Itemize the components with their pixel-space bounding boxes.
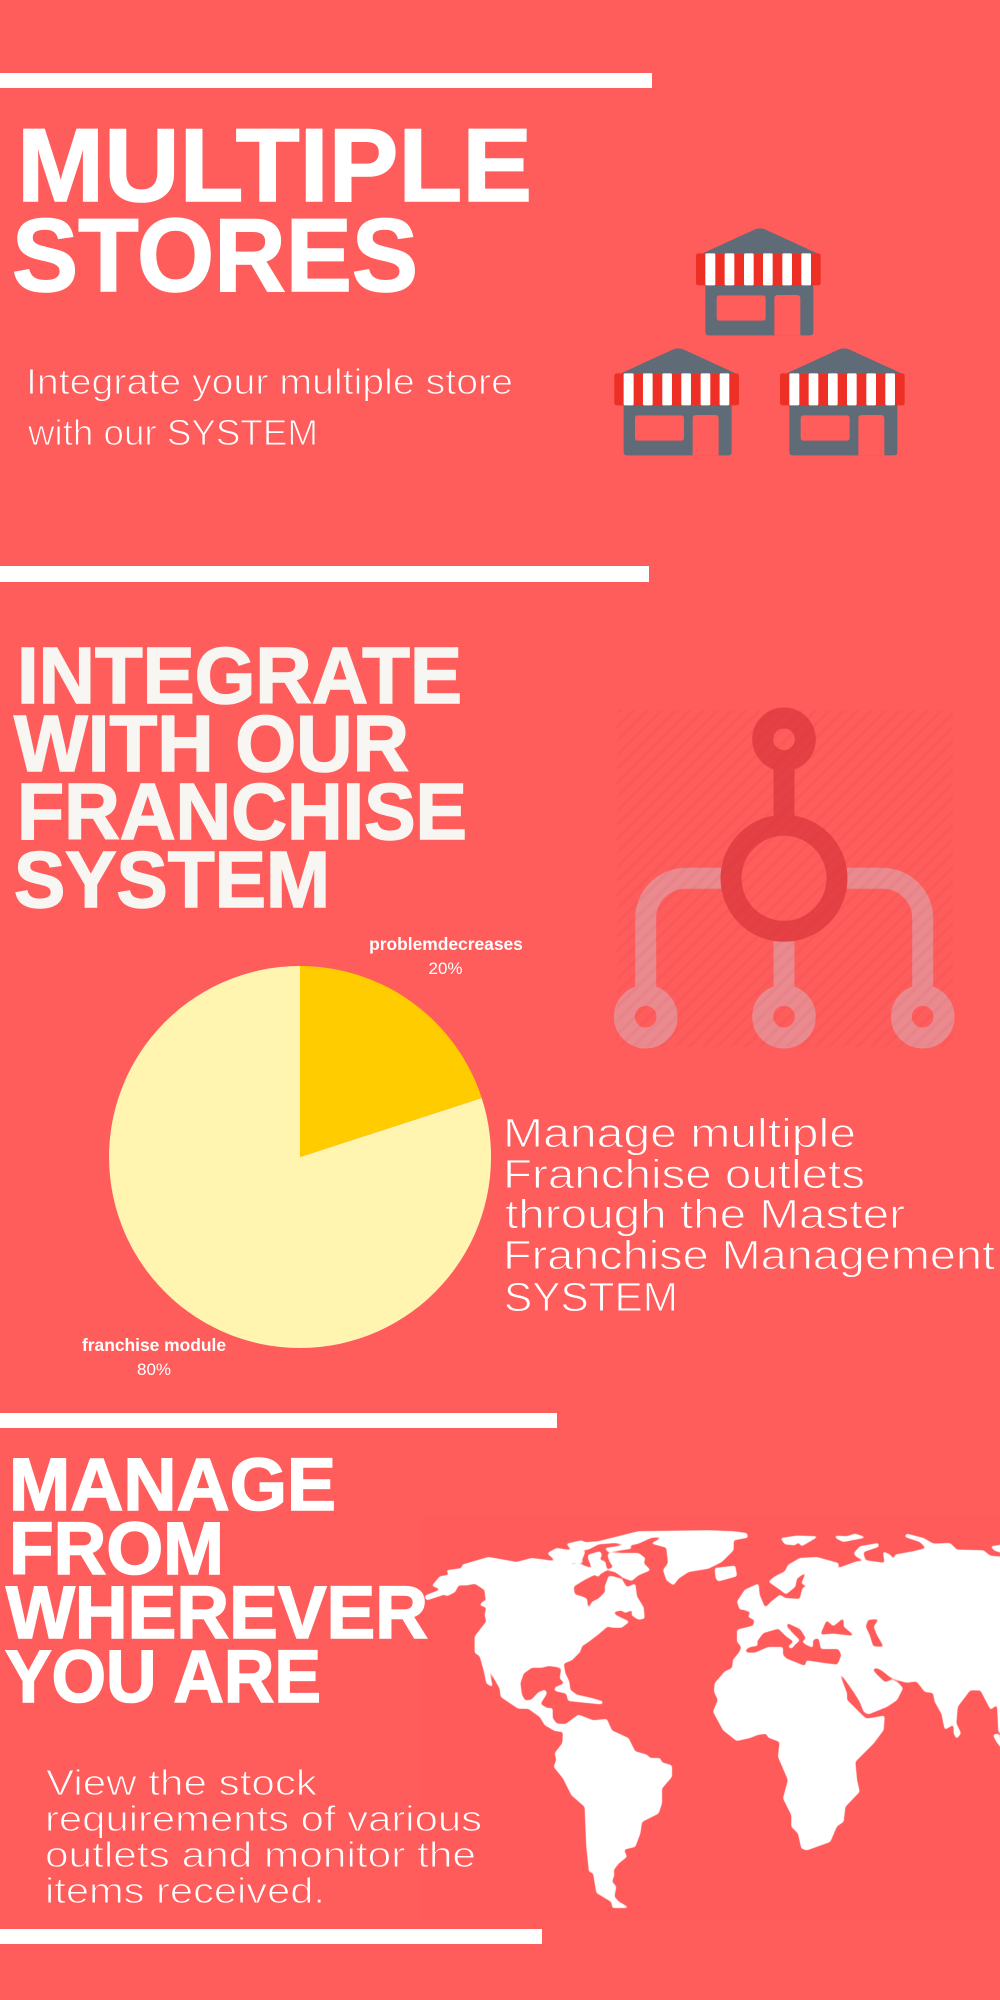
icon: bottom left store xyxy=(614,348,739,455)
title: manage from wherever you are: WHEREVER xyxy=(6,1571,428,1654)
text: integrate your multiple store xyxy=(26,361,513,453)
value: 20%: 20% xyxy=(428,959,463,978)
label: problemdecreases: problemdecreases xyxy=(369,934,523,954)
black sea xyxy=(821,1618,854,1636)
hudson bay xyxy=(574,1575,608,1608)
decorative hatch square xyxy=(617,710,953,1047)
text: view the stock requirements: View the stock xyxy=(46,1762,318,1803)
adriatic sea xyxy=(787,1623,806,1642)
text: view the stock requirements xyxy=(45,1762,482,1911)
title: integrate with our franchise system: SYSTEM xyxy=(14,835,330,924)
title: integrate with our franchise system: FRANCHISE xyxy=(17,767,467,856)
title: manage from wherever you are xyxy=(5,1443,428,1718)
title: integrate with our franchise system: INTEGRATE xyxy=(17,631,462,720)
title: multiple stores xyxy=(12,108,532,314)
text: manage multiple franchise outlets: through the Master xyxy=(505,1191,905,1237)
world map xyxy=(420,1515,1000,1920)
title: multiple stores: STORES xyxy=(12,198,418,314)
icon: top store xyxy=(696,228,821,335)
title: multiple stores: MULTIPLE xyxy=(17,108,532,224)
icon: hierarchy network xyxy=(617,710,953,1047)
text: manage multiple franchise outlets xyxy=(503,1110,996,1320)
title: integrate with our franchise system: WITH OUR xyxy=(14,699,409,788)
text: integrate your multiple store: with our SYSTEM xyxy=(27,412,318,453)
map: south america xyxy=(554,1715,672,1908)
map: north america and greenland xyxy=(425,1531,748,1732)
icon: three stores xyxy=(614,228,905,455)
text: manage multiple franchise outlets: SYSTEM xyxy=(504,1274,678,1320)
caspian sea xyxy=(866,1619,883,1647)
text: manage multiple franchise outlets: Franchise Management xyxy=(503,1232,996,1278)
divider bar: bottom xyxy=(0,1929,542,1944)
pie slice: franchise module 80% xyxy=(109,966,491,1348)
chart: pie xyxy=(82,934,523,1379)
text: view the stock requirements: outlets and monitor the xyxy=(45,1834,476,1875)
title: manage from wherever you are: FROM xyxy=(9,1507,224,1590)
divider bar: second xyxy=(0,566,649,582)
title: manage from wherever you are: YOU ARE xyxy=(5,1635,321,1718)
text: integrate your multiple store: Integrate your multiple store xyxy=(26,361,513,402)
mediterranean sea xyxy=(746,1629,841,1666)
text: view the stock requirements: requirements of various xyxy=(45,1798,482,1839)
title: integrate with our franchise system xyxy=(14,631,467,924)
value: 80%: 80% xyxy=(137,1360,171,1379)
icon: dark hub xyxy=(731,718,837,931)
text: manage multiple franchise outlets: Manage multiple xyxy=(503,1110,856,1156)
icon: bottom right store xyxy=(780,348,905,455)
pie slice: problemdecreases 20% xyxy=(300,966,482,1157)
title: manage from wherever you are: MANAGE xyxy=(9,1443,336,1526)
icon: light branches xyxy=(624,878,944,1038)
text: view the stock requirements: items received. xyxy=(45,1870,325,1911)
text: manage multiple franchise outlets: Franchise outlets xyxy=(503,1151,865,1197)
label: franchise module: franchise module xyxy=(82,1335,226,1355)
divider bar: third xyxy=(0,1413,557,1428)
map: eurasia and africa xyxy=(713,1534,1000,1850)
divider bar: top xyxy=(0,73,652,88)
